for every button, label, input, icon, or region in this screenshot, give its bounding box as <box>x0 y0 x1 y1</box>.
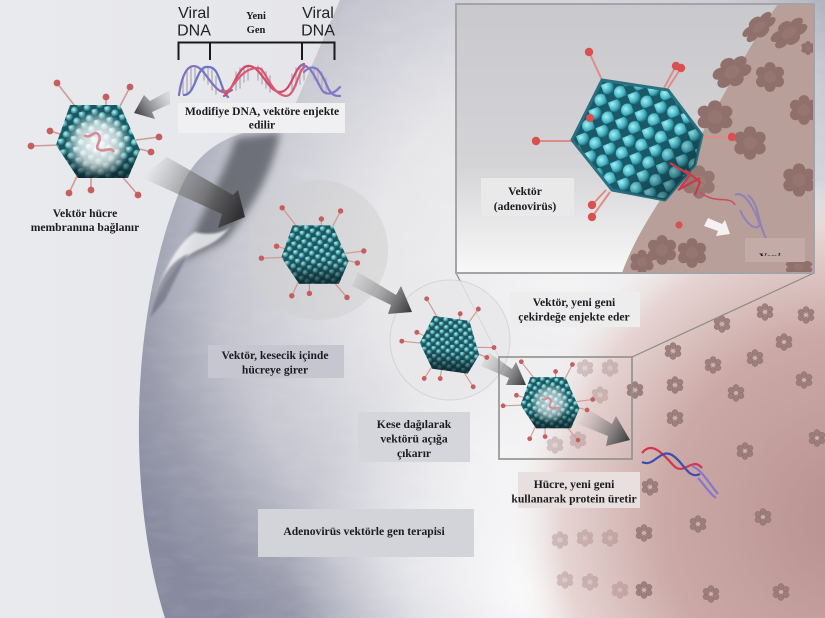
label: injects gene to nucleus <box>510 292 640 327</box>
label: cell makes protein <box>511 472 640 508</box>
label: enters in vesicle: hücreye girer <box>242 364 308 376</box>
label: modified DNA injected <box>178 103 345 133</box>
virus: released from vesicle <box>394 293 502 392</box>
cell membrane fold <box>150 132 280 318</box>
DNA double helix <box>179 64 340 97</box>
label: cell makes protein: Hücre, yeni geni <box>534 478 614 491</box>
arrow: DNA to vector <box>134 90 170 119</box>
virus: in vesicle <box>259 205 367 300</box>
arrow: vector to cell <box>140 157 245 228</box>
pink target cell <box>500 175 825 618</box>
label: Viral DNA right: DNA <box>301 22 335 40</box>
label: Yeni gen clipped: Yeni <box>759 251 782 264</box>
inset panel <box>456 4 818 276</box>
inset cell surface <box>622 4 814 273</box>
label: enters in vesicle: Vektör, kesecik içinde <box>221 349 329 362</box>
label: vector binds to membrane <box>31 207 139 234</box>
viral DNA labels and brackets <box>177 5 335 60</box>
label: cell makes protein: kullanarak protein üretir <box>511 492 637 506</box>
receptor clusters on cell surface <box>547 304 825 602</box>
label: vector binds to membrane: membranına bağlanır <box>31 221 139 234</box>
arrow: to vesicle <box>352 272 412 314</box>
label: Yeni Gen: Gen <box>247 25 265 36</box>
label: vector binds to membrane: Vektör hücre <box>53 207 117 220</box>
zoom guide lines <box>456 273 814 357</box>
label: modified DNA injected: Modifiye DNA, vektöre enjekte <box>185 105 339 118</box>
protein-coding gene <box>642 448 718 498</box>
label: modified DNA injected: edilir <box>249 118 275 132</box>
label: vector adenovirus: Vektör <box>508 185 542 198</box>
label: Viral DNA left: DNA <box>177 22 211 40</box>
label: Viral DNA right: Viral <box>302 5 334 22</box>
label: vesicle dissolves: çıkarır <box>397 447 431 460</box>
label: vesicle dissolves: Kese dağılarak <box>377 418 451 431</box>
inset receptors <box>630 7 818 276</box>
label: Yeni Gen: Yeni <box>246 11 266 22</box>
inset backdrop <box>457 5 747 272</box>
arrow: vesicle to release <box>481 352 526 385</box>
arrow: release to nucleus <box>578 408 630 446</box>
virus: bound to membrane <box>28 80 162 198</box>
white arrow <box>704 218 730 236</box>
label: vesicle dissolves <box>358 412 470 462</box>
label: vector adenovirus: (adenovirüs) <box>494 200 556 213</box>
virus: uncoating with gene <box>501 359 595 442</box>
injected gene <box>670 163 766 238</box>
inset vector (adenovirus) <box>572 80 702 200</box>
brackets <box>178 42 334 60</box>
docking receptor dark <box>683 165 715 199</box>
label: injects gene to nucleus: Vektör, yeni geni <box>533 296 615 309</box>
inset vector spikes <box>532 48 736 221</box>
label: enters in vesicle <box>208 345 344 378</box>
vesicle 1 <box>248 180 388 320</box>
label: vector adenovirus <box>481 178 574 216</box>
title panel: Adenovirüs vektörle gen terapisi <box>283 525 445 538</box>
label: Viral DNA left: Viral <box>178 5 210 22</box>
label: vesicle dissolves: vektörü açığa <box>380 432 448 446</box>
label: Yeni gen clipped <box>745 238 805 264</box>
zoom box <box>499 357 632 459</box>
title panel <box>258 509 474 557</box>
label: injects gene to nucleus: çekirdeğe enjekte eder <box>518 310 630 324</box>
vesicle 2 <box>390 280 510 400</box>
inset border <box>456 4 814 273</box>
